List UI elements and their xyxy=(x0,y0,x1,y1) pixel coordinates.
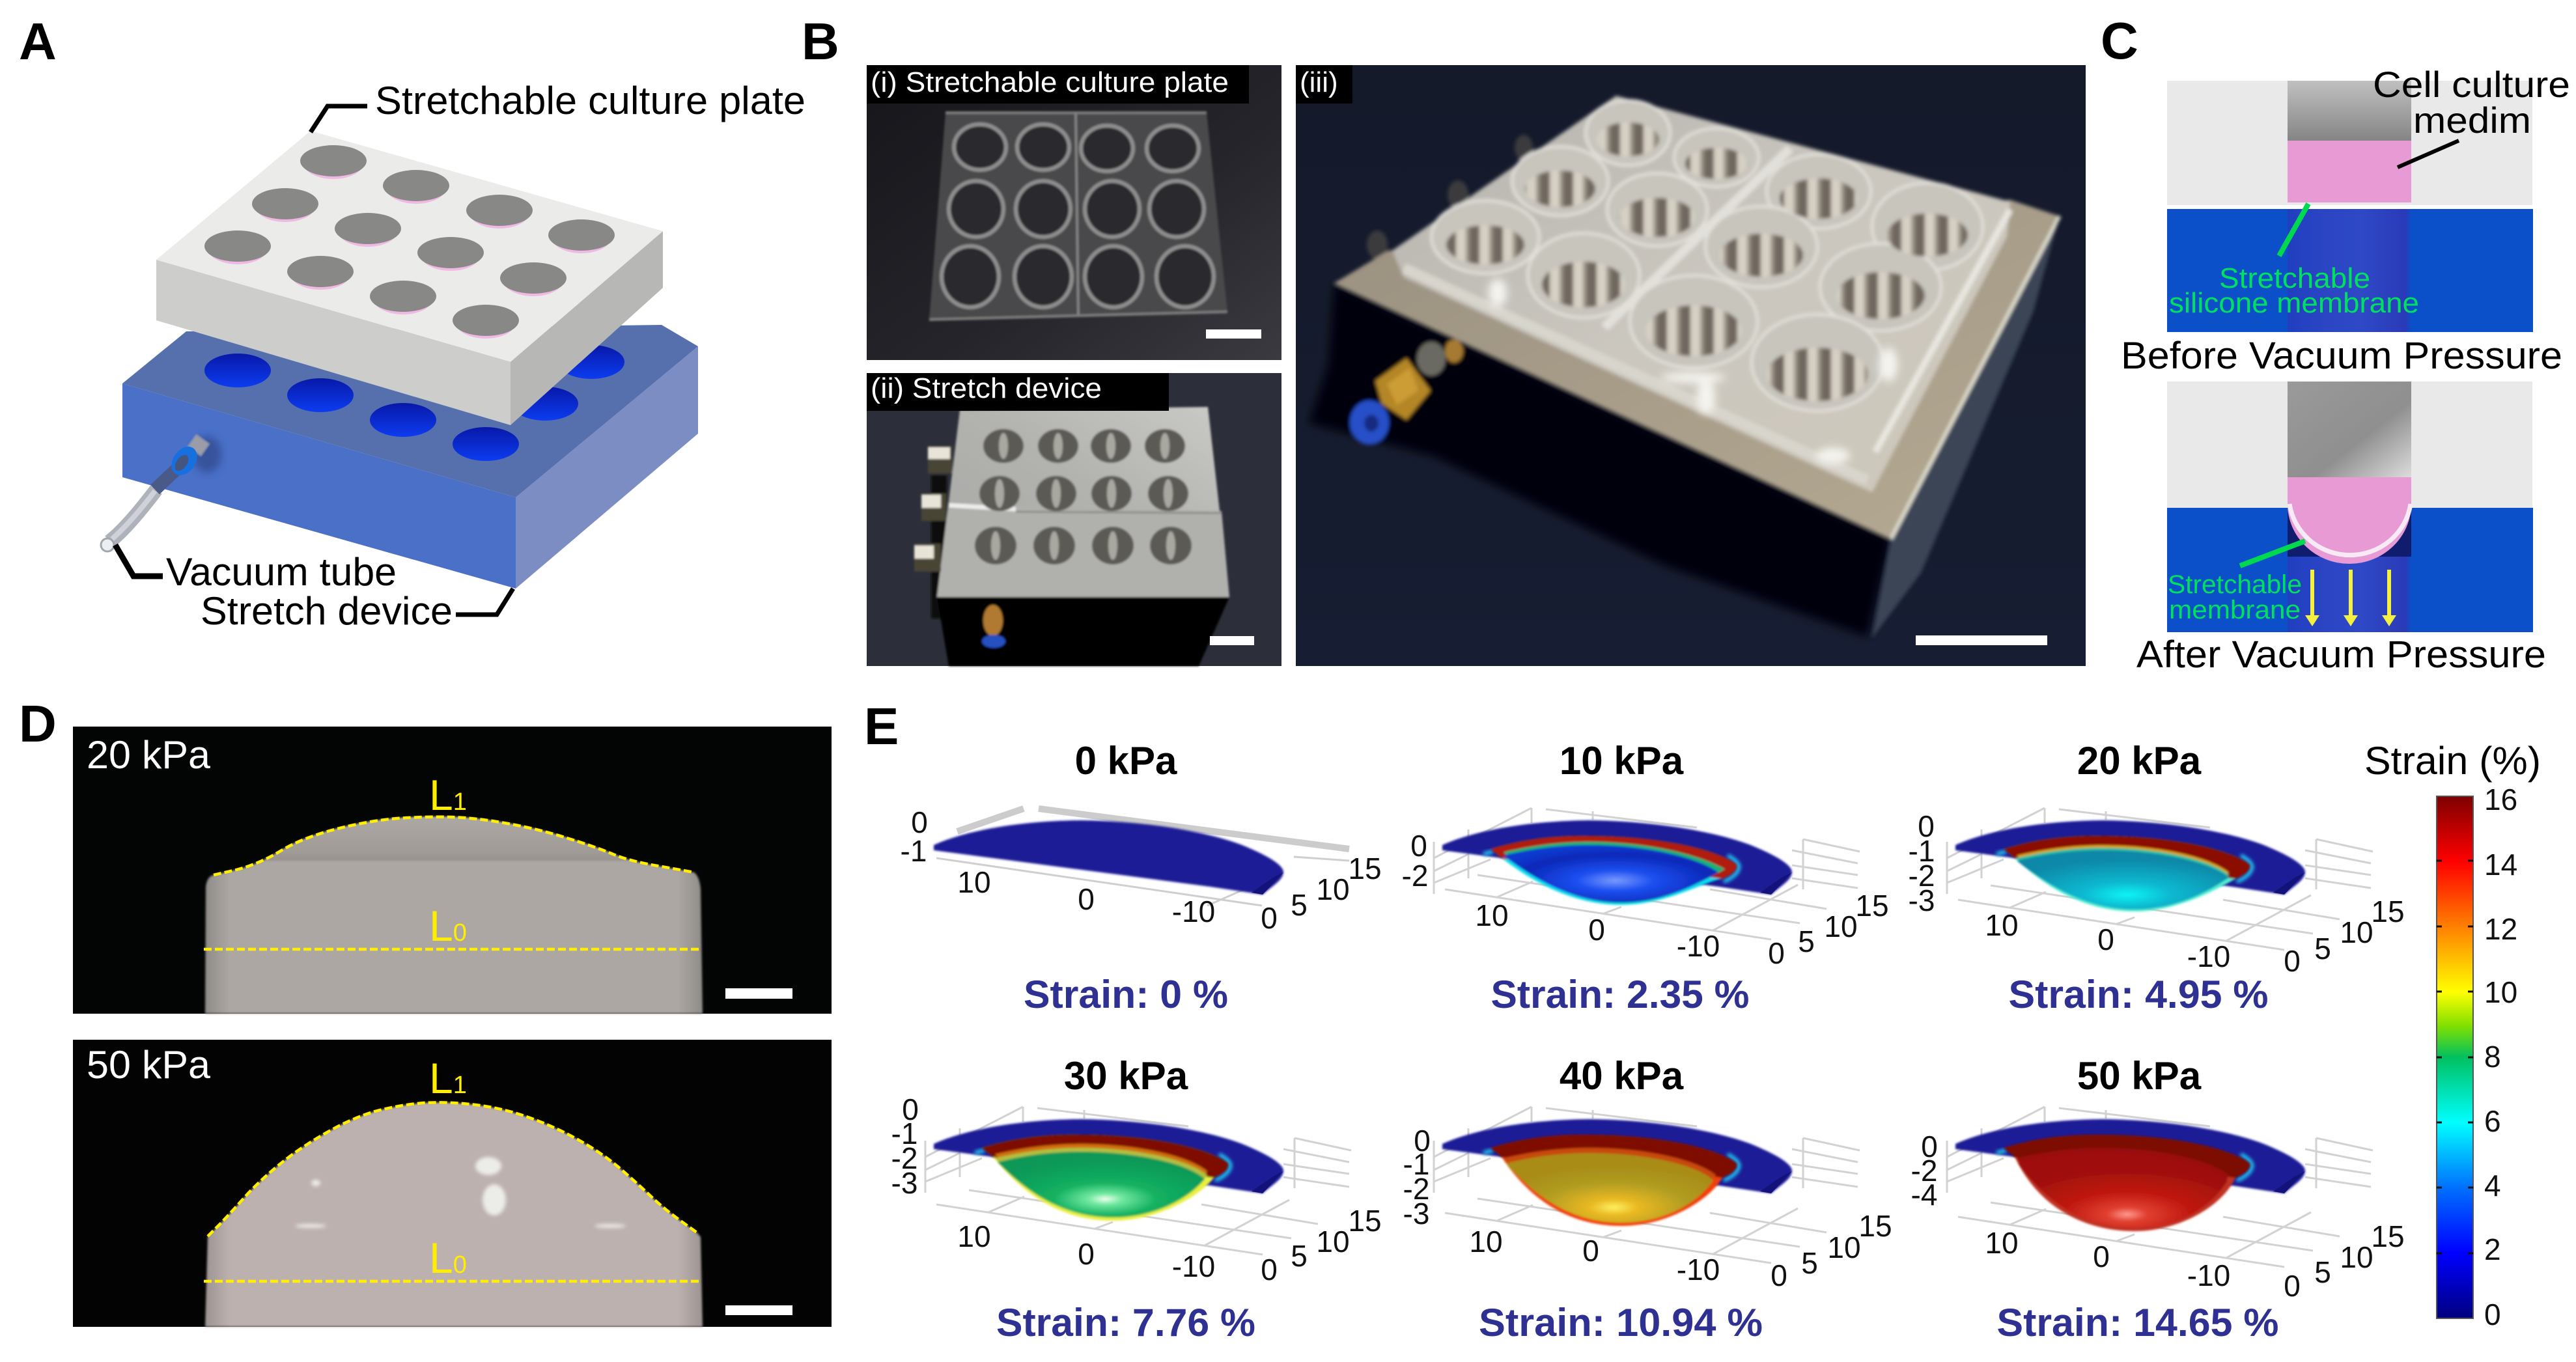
panel E: strain simulations xyxy=(864,697,2541,1344)
colour bar legend: 6 xyxy=(2484,1104,2501,1138)
plot: 50 kPa: 0 xyxy=(1921,1130,1938,1163)
plot: 40 kPa: -2 xyxy=(1403,1172,1429,1206)
plot: 50 kPa: 5 xyxy=(2314,1255,2331,1289)
plot: 20 kPa: -3 xyxy=(1909,883,1935,917)
panel B: photographs xyxy=(802,12,2086,666)
plot: 0 kPa: -1 xyxy=(901,834,927,868)
colour bar legend: 14 xyxy=(2484,848,2517,882)
photo i: stretchable culture plate xyxy=(867,65,1281,360)
caption: before vacuum pressure: Before Vacuum Pressure xyxy=(2121,335,2562,377)
L1 dashed curve xyxy=(214,817,694,875)
plot: 20 kPa: 20 kPa xyxy=(2077,739,2202,783)
photo iii: assembled device xyxy=(1296,65,2086,666)
plot: 20 kPa: 5 xyxy=(2314,932,2331,966)
label: stretchable silicone membrane xyxy=(2169,262,2419,319)
plot: 50 kPa: -4 xyxy=(1911,1178,1937,1212)
plot: 10 kPa: 5 xyxy=(1798,924,1815,958)
label: stretchable membrane: membrane xyxy=(2169,596,2301,624)
L1 label: L1 xyxy=(429,771,467,819)
plot: 20 kPa: 10 xyxy=(1985,908,2019,942)
plot: 40 kPa: -3 xyxy=(1403,1197,1429,1230)
plot: 40 kPa: -10 xyxy=(1677,1253,1720,1286)
panel D: dome photographs xyxy=(19,695,832,1327)
panel letter C: C xyxy=(2101,12,2138,70)
plot: 20 kPa: -2 xyxy=(1909,859,1935,893)
plot: 40 kPa: 0 xyxy=(1414,1124,1431,1158)
label bar ii xyxy=(867,372,1169,411)
photo: 20 kPa xyxy=(73,727,832,1014)
plot: 30 kPa: -10 xyxy=(1172,1249,1215,1283)
panel letter A: A xyxy=(19,12,57,70)
plot: 10 kPa: -10 xyxy=(1677,929,1720,963)
label: stretchable membrane xyxy=(2168,570,2302,624)
plot: 40 kPa xyxy=(1403,1054,1892,1344)
plot: 50 kPa: -10 xyxy=(2187,1258,2230,1292)
panel A: device schematic xyxy=(19,12,805,633)
plot: 40 kPa: 0 xyxy=(1771,1258,1787,1292)
plot: 40 kPa: Strain: 10.94 % xyxy=(1479,1301,1763,1344)
label bar i: (i) Stretchable culture plate xyxy=(871,66,1229,98)
plot: 40 kPa: 0 xyxy=(1582,1234,1599,1268)
plot: 20 kPa: 10 xyxy=(2340,915,2373,949)
L0 dashed line xyxy=(204,1280,699,1283)
plot: 0 kPa: -10 xyxy=(1172,895,1215,928)
plot: 10 kPa xyxy=(1402,739,1889,1016)
diagram: after vacuum pressure xyxy=(2167,382,2533,632)
plot: 30 kPa: -2 xyxy=(891,1141,917,1175)
L1 dashed curve xyxy=(208,1102,697,1236)
plot: 30 kPa: 5 xyxy=(1291,1239,1308,1273)
plot: 50 kPa: 10 xyxy=(1985,1226,2019,1260)
plot: 10 kPa: -2 xyxy=(1402,859,1428,893)
label: stretchable culture plate: Stretchable culture plate xyxy=(375,79,805,122)
plot: 30 kPa: -1 xyxy=(891,1117,917,1150)
colour bar legend xyxy=(2364,739,2541,1331)
label 20 kPa: 20 kPa xyxy=(87,733,211,777)
plot: 30 kPa: 10 xyxy=(957,1219,991,1253)
plot: 50 kPa: 50 kPa xyxy=(2077,1054,2202,1098)
plot: 10 kPa: 0 xyxy=(1410,829,1427,863)
plot: 10 kPa: 10 kPa xyxy=(1560,739,1684,783)
plot: 0 kPa: 10 xyxy=(1316,872,1350,906)
plot: 30 kPa: -3 xyxy=(891,1166,917,1200)
plot: 30 kPa: 30 kPa xyxy=(1064,1054,1188,1098)
label bar ii: (ii) Stretch device xyxy=(871,372,1102,404)
vacuum tube xyxy=(101,434,221,551)
plot: 30 kPa xyxy=(891,1054,1382,1344)
label bar iii xyxy=(1296,65,1352,104)
label: stretch device: Stretch device xyxy=(201,589,453,633)
scale bar xyxy=(725,1305,792,1315)
leader: stretchable culture plate xyxy=(311,106,367,132)
label: stretchable silicone membrane: Stretchable xyxy=(2219,262,2370,294)
plot: 30 kPa: Strain: 7.76 % xyxy=(996,1301,1255,1344)
label: cell culture medium: Cell culture xyxy=(2373,64,2570,105)
plot: 30 kPa: 15 xyxy=(1348,1204,1382,1238)
plot: 10 kPa: 0 xyxy=(1768,936,1785,970)
plot: 30 kPa: 0 xyxy=(1078,1237,1095,1271)
plot: 0 kPa xyxy=(901,739,1382,1016)
plot: 50 kPa: Strain: 14.65 % xyxy=(1996,1301,2279,1344)
leader: vacuum tube xyxy=(115,545,163,576)
plot: 0 kPa: 0 kPa xyxy=(1075,739,1177,783)
plot: 30 kPa: 0 xyxy=(902,1092,919,1126)
plot: 30 kPa: 0 xyxy=(1261,1253,1278,1286)
photo ii: stretch device xyxy=(867,372,1281,666)
colour bar legend: 2 xyxy=(2484,1232,2501,1266)
leader: stretchable membrane xyxy=(2240,541,2305,566)
plot: 50 kPa: 10 xyxy=(2340,1240,2373,1274)
panel letter D: D xyxy=(19,695,57,753)
colour bar legend: 12 xyxy=(2484,912,2517,946)
plot: 40 kPa: 5 xyxy=(1801,1246,1818,1280)
colour bar legend: 10 xyxy=(2484,975,2517,1009)
L0 dashed line xyxy=(204,948,699,951)
colour bar legend: 16 xyxy=(2484,783,2517,816)
panel letter B: B xyxy=(802,12,839,70)
plot: 0 kPa: 0 xyxy=(1078,882,1095,916)
plot: 20 kPa: 0 xyxy=(2284,944,2301,978)
plot: 50 kPa: 0 xyxy=(2284,1269,2301,1303)
scale bar xyxy=(725,988,792,999)
photo: 50 kPa xyxy=(73,1040,832,1327)
stretch device block xyxy=(122,325,698,589)
plot: 50 kPa: 0 xyxy=(2093,1240,2110,1273)
plot: 10 kPa: 10 xyxy=(1475,898,1509,932)
panel C: cross-section diagrams xyxy=(2101,12,2570,676)
leader: stretch device xyxy=(456,589,513,615)
colour bar legend: 4 xyxy=(2484,1169,2501,1202)
plot: 40 kPa: -1 xyxy=(1403,1147,1429,1181)
plot: 40 kPa: 15 xyxy=(1858,1209,1892,1243)
leader: cell culture medium xyxy=(2398,141,2459,167)
scale bar i xyxy=(1206,329,1261,339)
plot: 30 kPa: 10 xyxy=(1316,1225,1350,1258)
label: vacuum tube: Vacuum tube xyxy=(166,550,397,594)
colour bar legend: 0 xyxy=(2484,1298,2501,1331)
colour bar legend: 8 xyxy=(2484,1040,2501,1074)
plot: 10 kPa: 15 xyxy=(1855,889,1889,923)
plot: 20 kPa: 0 xyxy=(1918,809,1935,843)
plot: 40 kPa: 40 kPa xyxy=(1560,1054,1684,1098)
plot: 0 kPa: 15 xyxy=(1348,852,1382,885)
scale bar ii xyxy=(1210,636,1254,645)
plot: 40 kPa: 10 xyxy=(1469,1225,1503,1258)
label: cell culture medium xyxy=(2373,64,2570,141)
plot: 0 kPa: 0 xyxy=(911,805,928,839)
L0 label: L0 xyxy=(429,1234,467,1282)
label: stretchable silicone membrane: silicone membrane xyxy=(2169,287,2419,319)
plot: 40 kPa: 10 xyxy=(1827,1230,1861,1264)
colour bar legend: Strain (%) xyxy=(2364,739,2541,783)
label bar iii: (iii) xyxy=(1300,66,1338,98)
plot: 10 kPa: Strain: 2.35 % xyxy=(1491,973,1749,1016)
label: stretchable membrane: Stretchable xyxy=(2168,570,2302,599)
plot: 0 kPa: 10 xyxy=(957,865,991,899)
panel letter E: E xyxy=(864,697,899,755)
label 50 kPa: 50 kPa xyxy=(87,1043,211,1087)
plot: 0 kPa: Strain: 0 % xyxy=(1024,973,1228,1016)
plot: 20 kPa: -1 xyxy=(1909,834,1935,868)
plot: 20 kPa xyxy=(1909,739,2405,1016)
plot: 50 kPa: -2 xyxy=(1911,1154,1937,1188)
plot: 50 kPa: 15 xyxy=(2371,1219,2405,1253)
plot: 0 kPa: 0 xyxy=(1261,901,1278,935)
plot: 50 kPa xyxy=(1911,1054,2405,1344)
plot: 20 kPa: 0 xyxy=(2097,923,2114,956)
L1 label: L1 xyxy=(429,1054,467,1102)
arrows: vacuum direction xyxy=(2305,570,2396,626)
plot: 20 kPa: 15 xyxy=(2371,895,2405,928)
stretchable culture plate xyxy=(156,131,663,425)
plot: 10 kPa: 10 xyxy=(1824,910,1858,943)
label: cell culture medium: medim xyxy=(2413,100,2531,141)
plot: 0 kPa: 5 xyxy=(1291,888,1308,922)
plot: 20 kPa: -10 xyxy=(2187,939,2230,973)
scale bar iii xyxy=(1916,635,2047,645)
caption: after vacuum pressure: After Vacuum Pressure xyxy=(2136,633,2546,676)
L0 label: L0 xyxy=(429,902,467,950)
plot: 20 kPa: Strain: 4.95 % xyxy=(2008,973,2269,1016)
plot: 10 kPa: 0 xyxy=(1588,913,1605,947)
leader: silicone membrane xyxy=(2279,204,2308,256)
diagram: before vacuum pressure xyxy=(2167,81,2533,332)
